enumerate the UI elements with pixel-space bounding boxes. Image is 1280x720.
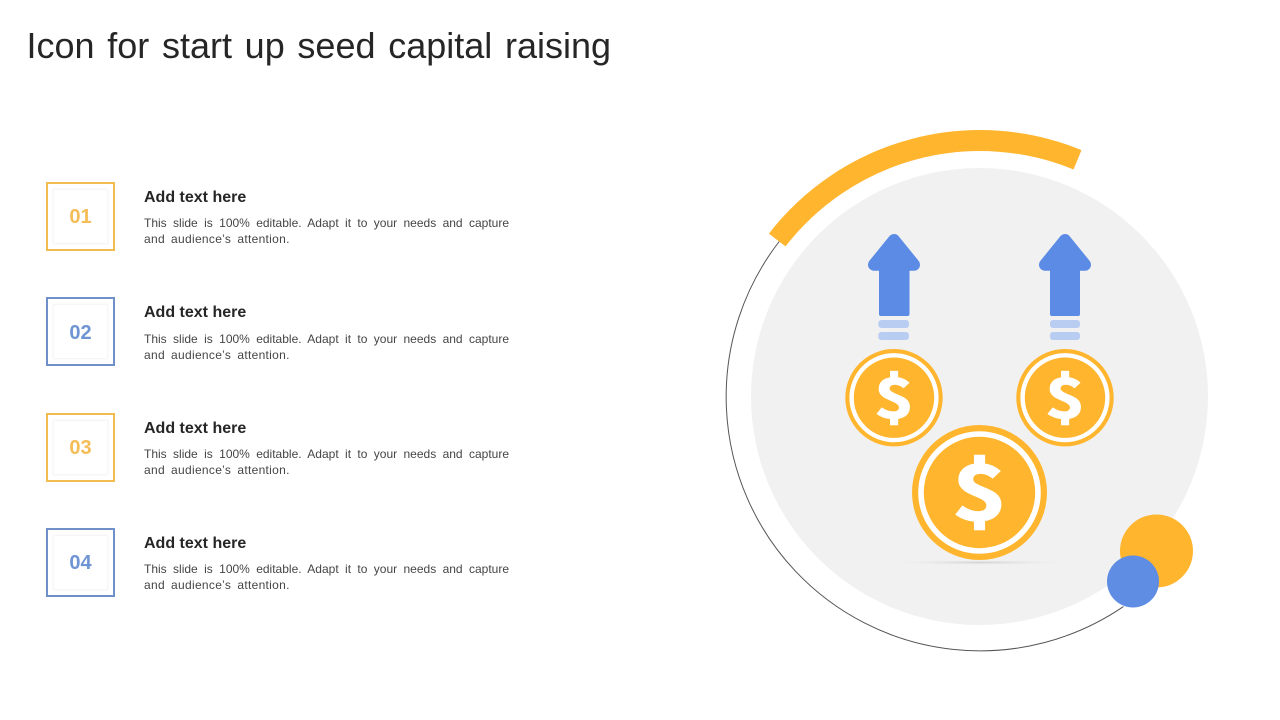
list item 03	[46, 413, 509, 482]
blue dot	[1107, 556, 1159, 608]
icon: right arrow	[1045, 240, 1085, 340]
icon: right coin: $	[1045, 354, 1085, 434]
coin shadow	[885, 560, 1075, 565]
thin outline arc	[726, 242, 1123, 651]
list item 04: Add text here	[144, 535, 246, 552]
list item 02: This slide is 100% editable. Adapt it to your needs and capture	[144, 332, 509, 346]
list item 01: This slide is 100% editable. Adapt it to your needs and capture	[144, 216, 509, 230]
list item 01: Add text here	[144, 189, 246, 206]
list item 02: 02	[69, 322, 92, 344]
list item 03: Add text here	[144, 420, 246, 437]
icon: left arrow	[874, 240, 914, 340]
list item 03: This slide is 100% editable. Adapt it to your needs and capture	[144, 447, 509, 461]
list item 01: and audience’s attention.	[144, 232, 290, 246]
title: Icon for start up seed capital raising	[26, 25, 611, 66]
list item 02: and audience’s attention.	[144, 348, 290, 362]
list item 04	[46, 528, 509, 597]
yellow dot	[1120, 514, 1193, 588]
icon: large coin: $	[952, 433, 1007, 542]
list item 04: and audience’s attention.	[144, 578, 290, 592]
list item 03: 03	[69, 437, 92, 459]
icon: right coin	[1016, 349, 1114, 446]
list item 04: 04	[69, 552, 92, 574]
list item 01	[46, 182, 509, 251]
thick yellow arc	[777, 141, 1078, 240]
list item 02: Add text here	[144, 304, 246, 321]
list item 04: This slide is 100% editable. Adapt it to your needs and capture	[144, 562, 509, 576]
icon: left coin	[845, 349, 943, 446]
grey background circle	[751, 168, 1208, 625]
icon: large coin	[912, 425, 1047, 560]
icon: left coin: $	[874, 354, 914, 434]
list item 01: 01	[69, 206, 92, 228]
list item 03: and audience’s attention.	[144, 463, 290, 477]
list item 02	[46, 297, 509, 366]
